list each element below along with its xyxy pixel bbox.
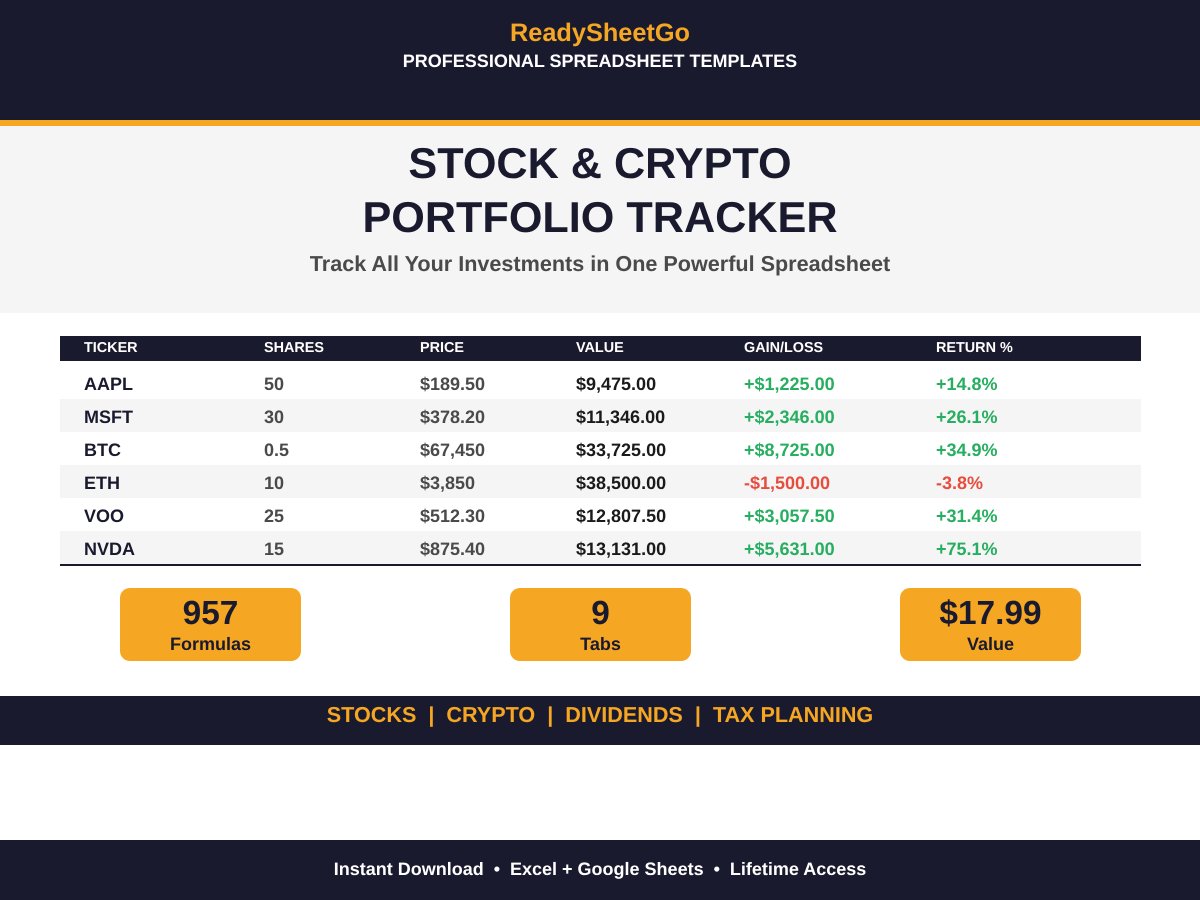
row: VOO: VOO (84, 506, 124, 526)
row: AAPL: 50 (264, 374, 284, 394)
row: MSFT: +26.1% (936, 407, 998, 427)
stat card: formulas: Formulas (170, 634, 251, 654)
subtitle: Track All Your Investments in One Powerful Spreadsheet (310, 251, 890, 276)
title line 1: STOCK & CRYPTO (408, 140, 792, 188)
row: BTC: 0.5 (264, 440, 289, 460)
row: BTC: +$8,725.00 (744, 440, 835, 460)
row: NVDA: $875.40 (420, 539, 485, 559)
row: ETH (60, 465, 1141, 498)
row: ETH: -$1,500.00 (744, 473, 830, 493)
row: VOO: +31.4% (936, 506, 998, 526)
stat card: value: $17.99 (939, 595, 1042, 632)
row: VOO: $12,807.50 (576, 506, 666, 526)
row: BTC: $67,450 (420, 440, 485, 460)
row: BTC: $33,725.00 (576, 440, 666, 460)
footer band (0, 840, 1200, 900)
brand tagline: PROFESSIONAL SPREADSHEET TEMPLATES (403, 51, 797, 71)
table header row: PRICE (420, 340, 464, 356)
row: BTC (84, 440, 998, 460)
row: MSFT (60, 399, 1141, 432)
row: VOO: +$3,057.50 (744, 506, 835, 526)
table header row: TICKER (84, 340, 138, 356)
row: AAPL: AAPL (84, 374, 133, 394)
row: BTC: BTC (84, 440, 121, 460)
row: ETH: ETH (84, 473, 120, 493)
row: NVDA: +75.1% (936, 539, 998, 559)
table header row: SHARES (264, 340, 324, 356)
stat card: value (900, 588, 1081, 661)
brand name: ReadySheetGo (510, 19, 690, 47)
row: ETH: -3.8% (936, 473, 983, 493)
row: ETH: $38,500.00 (576, 473, 666, 493)
table header row: RETURN % (936, 340, 1013, 356)
row: AAPL (84, 374, 998, 394)
table header row: GAIN/LOSS (744, 340, 823, 356)
table header row: VALUE (576, 340, 624, 356)
row: BTC: +34.9% (936, 440, 998, 460)
row: VOO: $512.30 (420, 506, 485, 526)
row: NVDA: 15 (264, 539, 284, 559)
title line 2: PORTFOLIO TRACKER (362, 194, 838, 242)
stat card: formulas (120, 588, 301, 661)
row: ETH: 10 (264, 473, 284, 493)
row: MSFT: $11,346.00 (576, 407, 665, 427)
row: ETH: $3,850 (420, 473, 475, 493)
stat card: tabs (510, 588, 691, 661)
category banner (0, 696, 1200, 745)
row: MSFT: 30 (264, 407, 284, 427)
row: NVDA: +$5,631.00 (744, 539, 835, 559)
row: NVDA: $13,131.00 (576, 539, 666, 559)
stat card: tabs: 9 (591, 595, 610, 632)
accent stripe (0, 120, 1200, 126)
row: AAPL: +$1,225.00 (744, 374, 835, 394)
row: MSFT: $378.20 (420, 407, 485, 427)
title panel (0, 126, 1200, 313)
row: NVDA: NVDA (84, 539, 135, 559)
header band (0, 0, 1200, 126)
row: VOO (84, 506, 998, 526)
row: VOO: 25 (264, 506, 284, 526)
portfolio table (60, 336, 1141, 566)
row: NVDA (60, 531, 1141, 564)
row: AAPL: $189.50 (420, 374, 485, 394)
row: AAPL: $9,475.00 (576, 374, 656, 394)
table header row (60, 336, 1141, 361)
row: AAPL: +14.8% (936, 374, 998, 394)
stat card: value: Value (967, 634, 1014, 654)
stat card: formulas: 957 (183, 595, 238, 632)
footer text: Instant Download • Excel + Google Sheets • Lifetime Access (334, 859, 866, 879)
row: MSFT: +$2,346.00 (744, 407, 835, 427)
row: MSFT: MSFT (84, 407, 133, 427)
category text: STOCKS | CRYPTO | DIVIDENDS | TAX PLANNING (327, 702, 873, 727)
stat card: tabs: Tabs (580, 634, 621, 654)
